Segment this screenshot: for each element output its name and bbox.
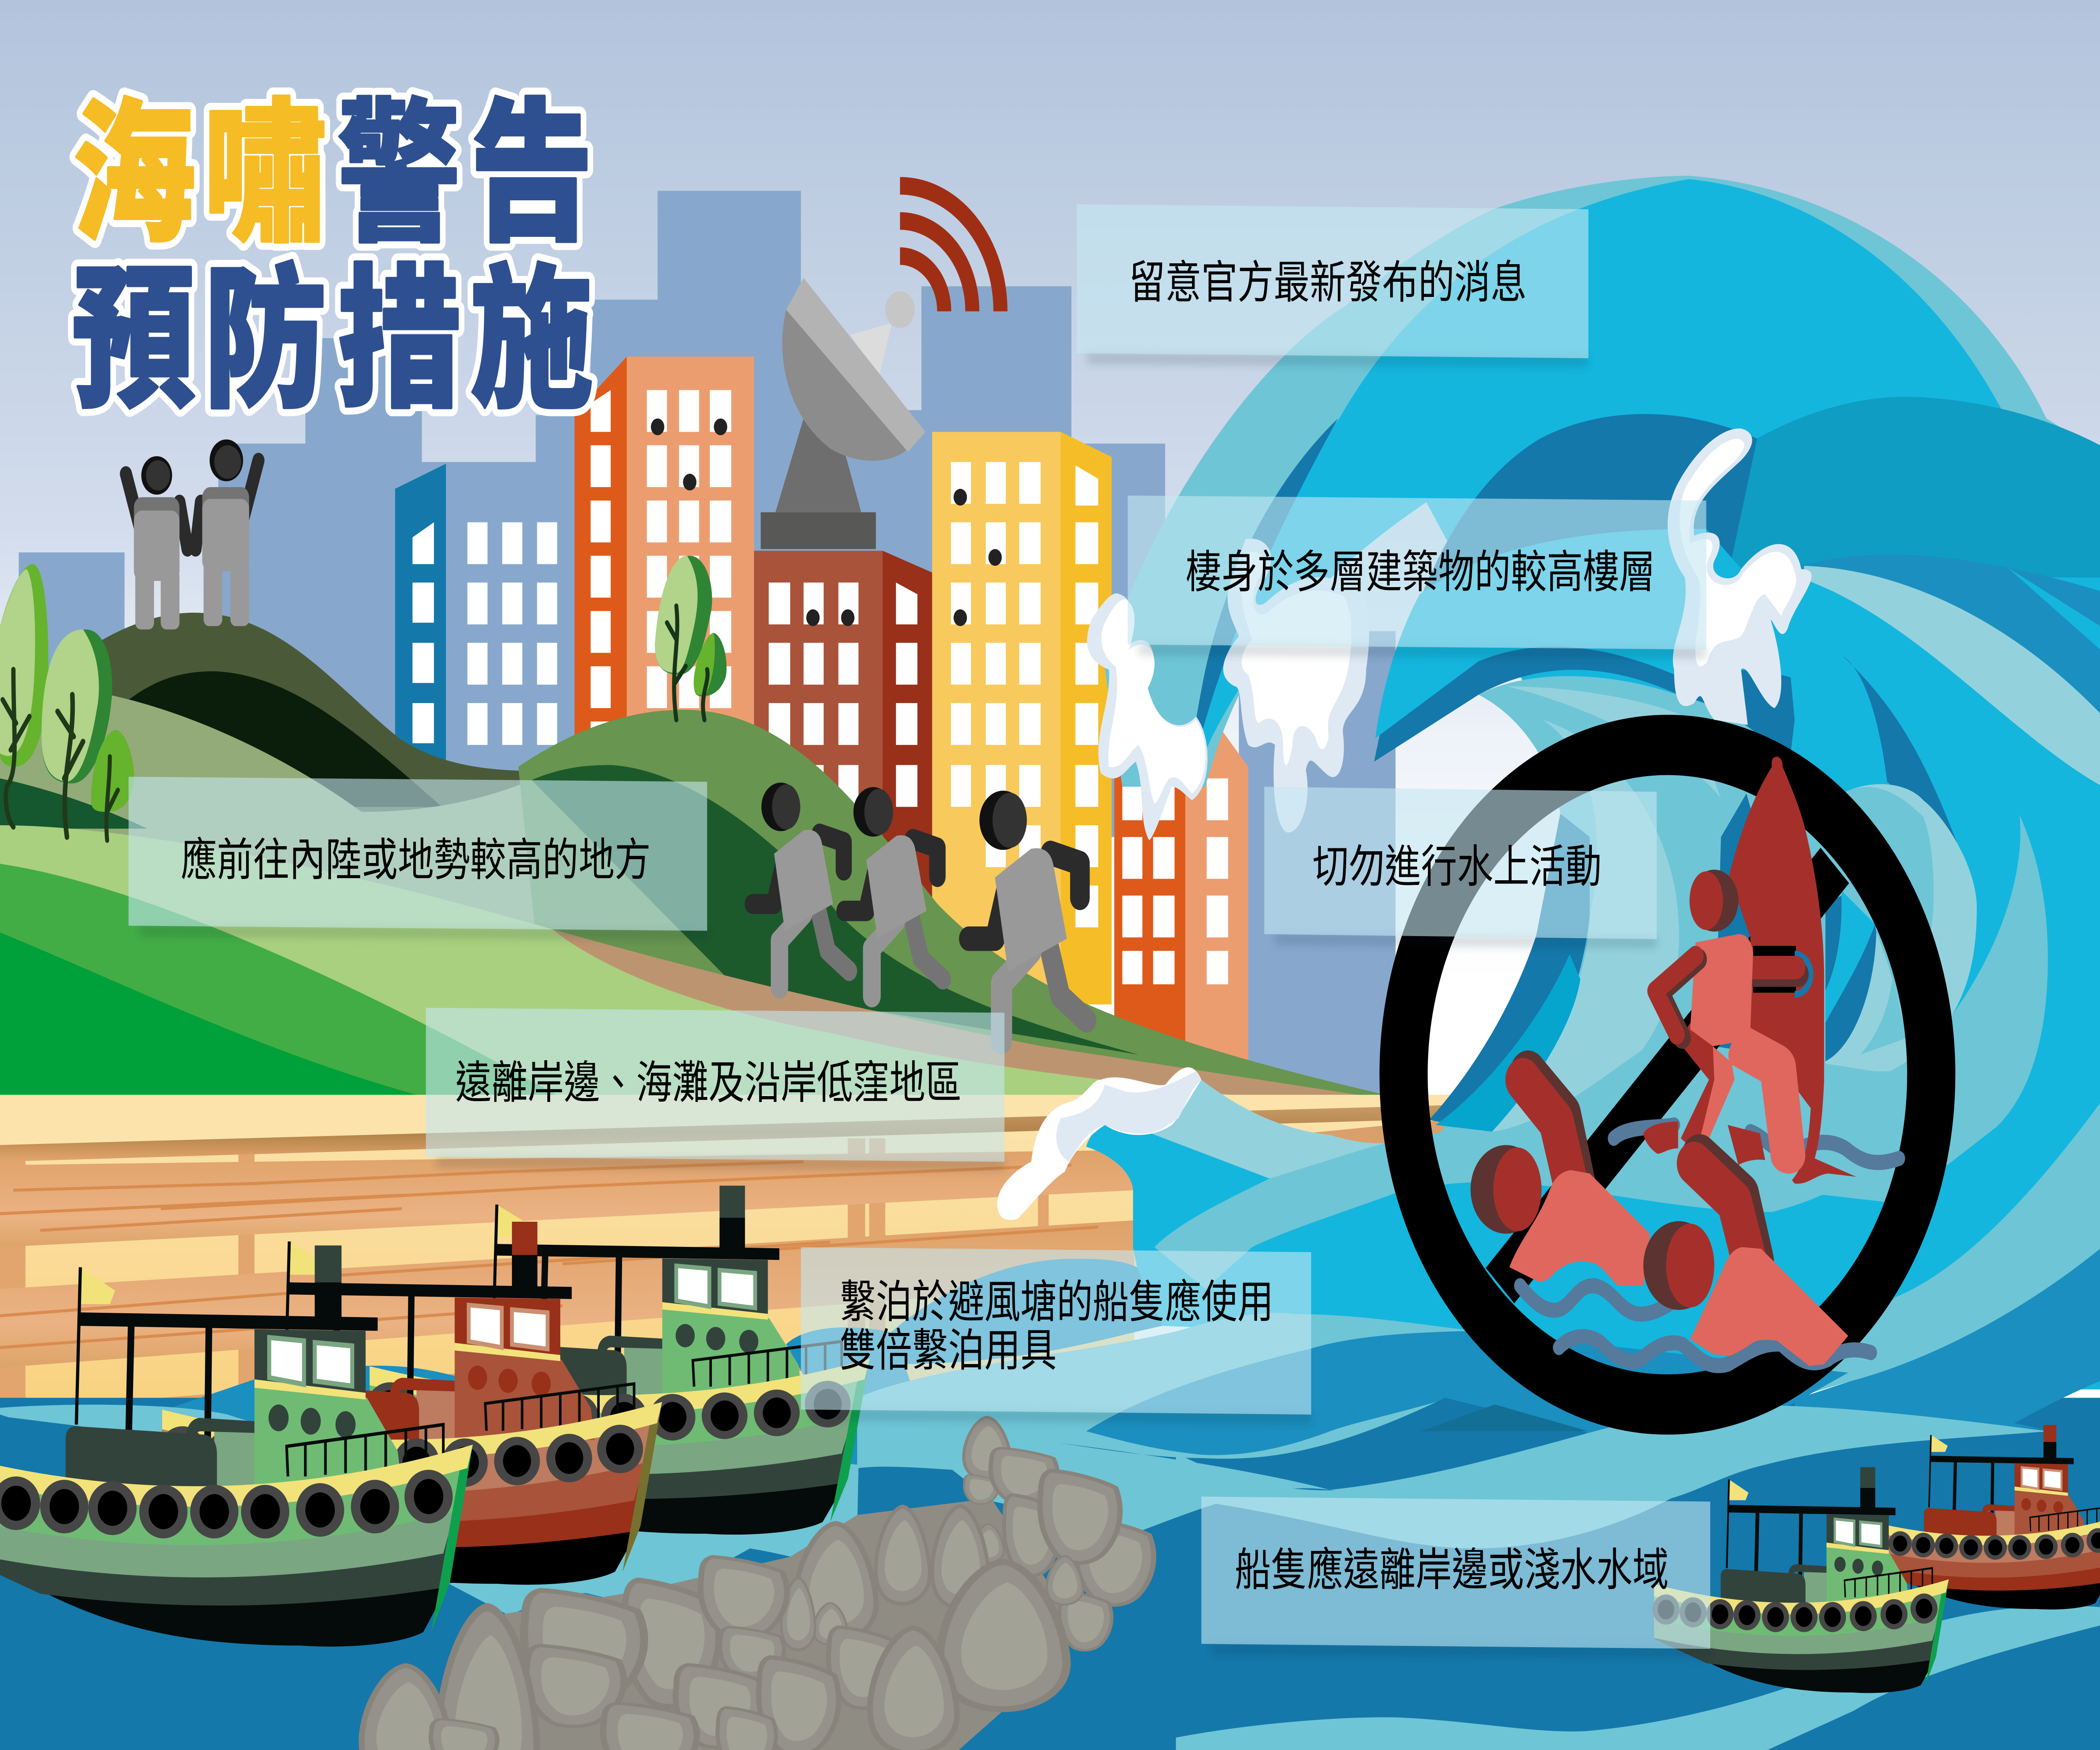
trees — [0, 556, 727, 840]
boat right red — [1865, 1425, 2100, 1609]
shore wave and mid sea swells — [786, 1038, 1915, 1548]
people running uphill — [753, 782, 1087, 1041]
icon: swimmer right — [1643, 1157, 1848, 1366]
big back wave — [1105, 176, 2100, 937]
second wave crest — [1374, 397, 2100, 1005]
callout: go inland: 應前往內陸或地勢較高的地方 — [181, 835, 651, 885]
breakwater rocks — [362, 1417, 1154, 1750]
orange building — [575, 357, 754, 792]
title: 海嘯 — [72, 89, 327, 261]
callout: follow official news: 留意官方最新發布的消息 — [1129, 257, 1527, 308]
foam spray middle — [1223, 538, 1369, 832]
foam spray right — [1668, 428, 1811, 725]
foam on the shore wave — [997, 1067, 1201, 1220]
people waving on the hill — [126, 439, 258, 630]
right wave body — [1728, 554, 2100, 1430]
callout: vessels stay off shallow water: 船隻應遠離岸邊或淺水水域 — [1235, 1545, 1669, 1595]
callout: go inland — [129, 777, 707, 937]
sea — [0, 1366, 2100, 1750]
callout: no water activities: 切勿進行水上活動 — [1312, 841, 1602, 892]
water squiggles — [1520, 1125, 1899, 1366]
barrel inside the wave — [1420, 676, 1929, 1373]
boat middle red — [160, 1222, 662, 1585]
right orange building — [1114, 711, 1248, 1071]
title: 警告 — [338, 89, 593, 261]
icon: signal arcs — [900, 186, 1000, 311]
hills — [0, 613, 1393, 1098]
boat front green — [0, 1246, 473, 1647]
boat back green — [367, 1186, 870, 1535]
callout: double mooring — [801, 1247, 1311, 1421]
callout: double mooring: 繫泊於避風塘的船隻應使用 — [840, 1277, 1273, 1327]
callout: double mooring: 雙倍繫泊用具 — [840, 1325, 1057, 1376]
callout: vessels stay off shallow water — [1201, 1497, 1710, 1656]
blue building — [395, 464, 580, 787]
foam spray left — [1087, 593, 1208, 840]
callout: high floors — [1128, 496, 1706, 656]
brown-red building — [754, 551, 932, 937]
ocean bands on the right — [1176, 1405, 2100, 1750]
title — [72, 89, 593, 426]
icon: swimmer left — [1470, 1073, 1650, 1286]
callout: no water activities — [1264, 787, 1657, 946]
icon: surfer — [1643, 757, 1856, 1184]
city skyline silhouette — [19, 191, 1396, 1105]
yellow building — [932, 432, 1112, 1005]
icon: prohibition sign — [1404, 745, 1931, 1404]
callout: stay away from shore: 遠離岸邊、海灘及沿岸低窪地區 — [455, 1057, 961, 1108]
title: 預防措施 — [72, 254, 593, 426]
callout: follow official news — [1077, 204, 1588, 365]
wooden seawall — [0, 1095, 1460, 1440]
icon: satellite dish — [761, 278, 925, 549]
boat right green — [1653, 1467, 1949, 1693]
title: 海嘯警告 — [72, 89, 593, 261]
callout: high floors: 棲身於多層建築物的較高樓層 — [1185, 547, 1655, 597]
callout: stay away from shore — [426, 1008, 1005, 1168]
title: 預防措施 — [72, 254, 593, 426]
